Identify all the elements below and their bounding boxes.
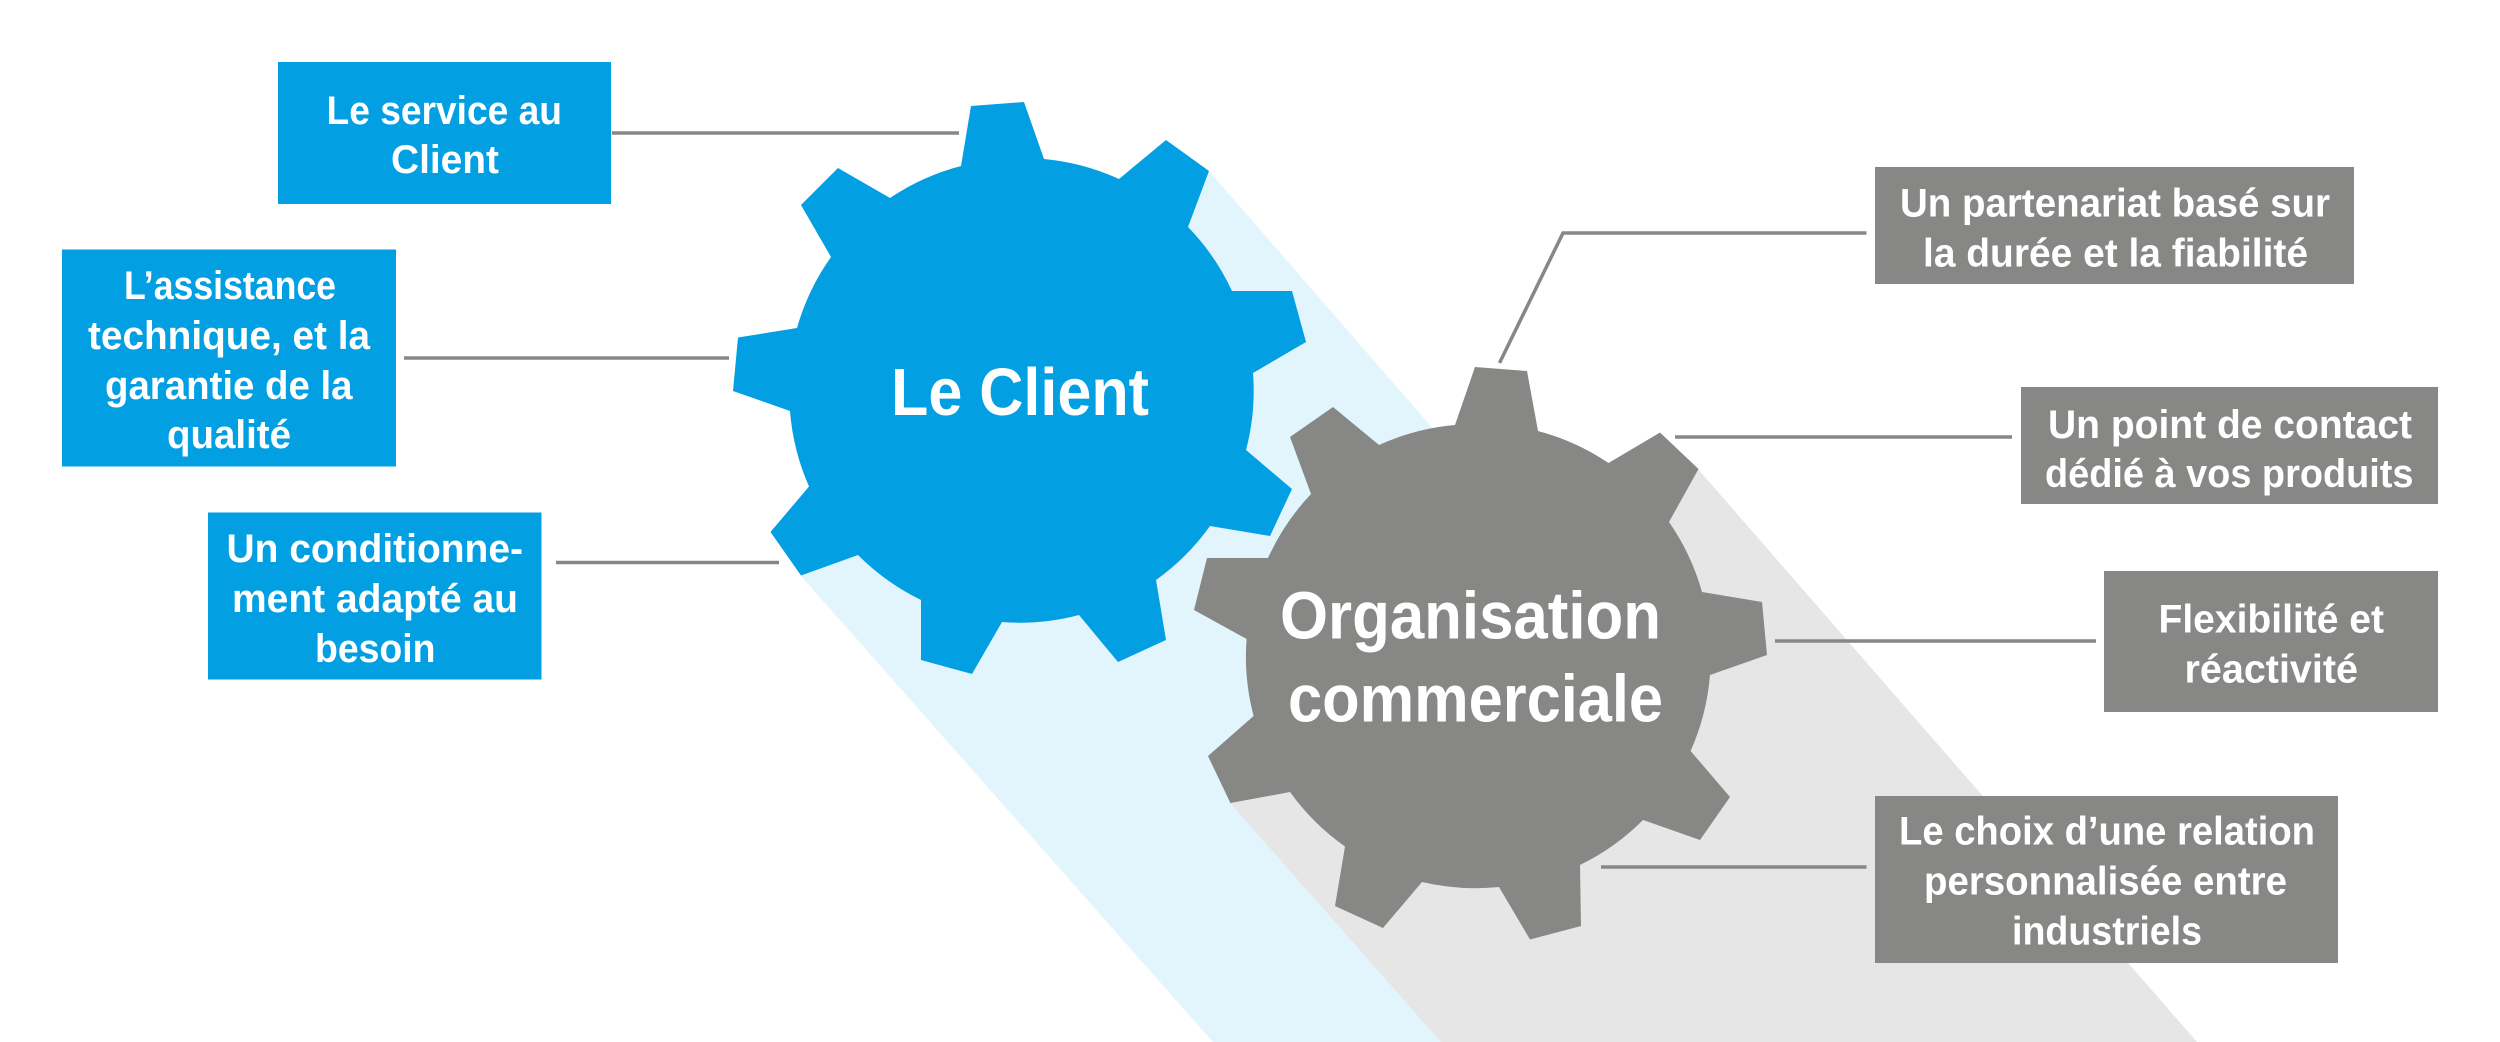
callout: Le choix d'une relation [1875, 796, 2338, 963]
connector: flexibilité [1775, 639, 2096, 643]
callout: Flexibilité et réactivité: Flexibilité et [2158, 598, 2384, 642]
gear: Organisation commerciale [1194, 367, 1767, 940]
callout: Un point de contact: dédié à vos produits [2045, 452, 2414, 496]
callout: Un conditionnement: besoin [315, 627, 436, 671]
gear label: Organisation commerciale [1280, 578, 1663, 736]
callout: L'assistance technique: technique, et la [88, 314, 371, 358]
long shadow: blue gear [801, 171, 1966, 1042]
callout: Un conditionnement: Un conditionne- [226, 527, 523, 571]
gear shape: blue [733, 102, 1306, 674]
gear label: Organisation commerciale: Organisation [1280, 578, 1661, 654]
callout: L'assistance technique [62, 250, 396, 466]
gear shape: grey [1194, 367, 1767, 940]
callout: Le choix d'une relation: industriels [2012, 910, 2202, 954]
callout: L'assistance technique: L’assistance [124, 264, 336, 308]
connector: assistance technique [404, 356, 729, 360]
connector: conditionnement [556, 561, 779, 564]
callout: L'assistance technique: qualité [167, 413, 291, 457]
callout: Le service au Client: Le service au [326, 89, 562, 133]
callout: Le service au Client: Client [391, 138, 499, 182]
callout: Le service au Client [278, 62, 611, 204]
gear: Le Client [733, 102, 1306, 674]
connector: service au client [612, 131, 959, 135]
callout: L'assistance technique: garantie de la [105, 364, 353, 408]
gear label: Le Client: Le Client [891, 355, 1149, 430]
callout: Le choix d'une relation: personnalisée entre [1924, 860, 2287, 904]
connector: point de contact [1675, 435, 2012, 439]
callout: Flexibilité et réactivité [2104, 571, 2438, 712]
callout: Un point de contact [2021, 387, 2438, 504]
connector: relation personnalisée [1601, 865, 1866, 869]
callout: Flexibilité et réactivité: réactivité [2184, 648, 2358, 692]
callout: Un partenariat: Un partenariat basé sur [1900, 182, 2330, 226]
long shadow: grey gear [1230, 469, 2197, 1042]
callout: Un partenariat: la durée et la fiabilité [1923, 232, 2308, 276]
connector: partenariat [1500, 233, 1866, 363]
callout: Le choix d'une relation: Le choix d’une relation [1899, 810, 2315, 854]
callout: Un conditionnement [208, 512, 542, 680]
callout: Un conditionnement: ment adapté au [232, 577, 518, 621]
gear label: Organisation commerciale: commerciale [1288, 662, 1663, 736]
callout: Un point de contact: Un point de contact [2048, 403, 2412, 447]
callout: Un partenariat [1875, 167, 2354, 284]
